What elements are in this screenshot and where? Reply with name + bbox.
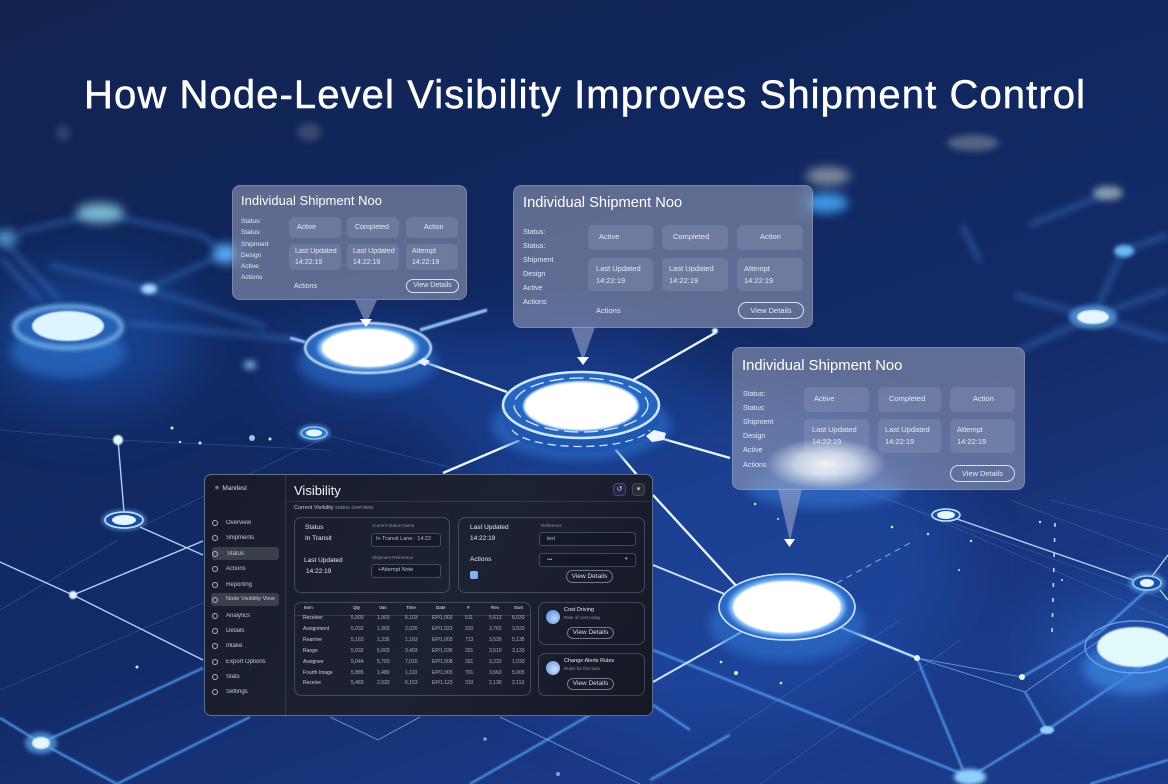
- table rows: EP/1,123: [432, 680, 453, 686]
- view details button: View Details: [750, 306, 792, 315]
- table rows: 3,663: [489, 670, 502, 676]
- field labels: Status:: [523, 227, 545, 236]
- status cells: 14:22:19: [412, 259, 439, 266]
- field labels: Actions: [241, 274, 262, 281]
- status cells: 14:22:19: [957, 437, 986, 446]
- thin bright connections: [0, 440, 1168, 660]
- pointer: [360, 319, 372, 327]
- card body: [513, 185, 813, 328]
- menu items: Reporting: [226, 582, 252, 588]
- table rows: EP/1,003: [432, 670, 453, 676]
- table rows: 5,003: [351, 615, 364, 621]
- table header: Van: [379, 605, 387, 610]
- small network nodes: [25, 305, 1165, 784]
- table rows: 5,483: [351, 680, 364, 686]
- alert card one: Rate of cost today: [564, 615, 600, 620]
- table rows: 1,110: [405, 670, 417, 676]
- field labels: Design: [241, 252, 261, 259]
- status cells: [804, 387, 1015, 453]
- alert card two: Rules for this lane: [564, 666, 600, 671]
- field labels: Active: [241, 263, 259, 270]
- view details button: View Details: [413, 282, 452, 289]
- card body: [232, 185, 467, 300]
- soft bokeh nodes: [0, 167, 850, 264]
- table rows: 1,335: [377, 637, 390, 643]
- table rows: [303, 615, 525, 686]
- status cells: Action: [424, 224, 443, 231]
- status cells: Last Updated: [596, 264, 641, 273]
- dashboard window: [204, 474, 653, 716]
- field labels: Shipment: [523, 255, 553, 264]
- pointer: [577, 357, 589, 365]
- table rows: 331: [465, 648, 473, 654]
- table rows: 3,233: [489, 659, 502, 665]
- status cells: [289, 217, 458, 270]
- node: far right hub: [1083, 621, 1168, 694]
- actions label: Actions: [813, 468, 838, 477]
- card heading: Individual Shipment Noo: [241, 193, 382, 208]
- update card: ▾: [625, 556, 628, 562]
- node: central hub: [491, 372, 671, 461]
- glow behind right card: [747, 468, 903, 508]
- field labels: Shipment: [241, 241, 268, 248]
- table rows: EP/1,023: [432, 626, 453, 632]
- status cells: Action: [973, 394, 994, 403]
- update card: [458, 517, 645, 593]
- table rows: 3,530: [489, 637, 502, 643]
- table rows: 5,703: [377, 659, 390, 665]
- soft blurred upper connections: [0, 193, 1168, 350]
- node: upper left hub: [298, 323, 438, 392]
- status card: [294, 517, 450, 593]
- status cells: Active: [297, 224, 316, 231]
- status cells: 14:22:19: [812, 437, 841, 446]
- table rows: Assignment: [303, 626, 329, 632]
- menu items: Overview: [226, 520, 251, 526]
- table rows: 3,763: [489, 626, 502, 632]
- table rows: 6,103: [405, 615, 418, 621]
- table header: Time: [406, 605, 416, 610]
- alert card one: [538, 602, 645, 645]
- table rows: 3,033: [512, 626, 525, 632]
- status cells: 14:22:19: [353, 259, 380, 266]
- menu items: Shipments: [226, 535, 254, 541]
- menu items: Status: [227, 551, 244, 557]
- status cells: Completed: [673, 232, 709, 241]
- data table: [294, 602, 531, 696]
- field labels: Status:: [241, 218, 261, 225]
- status card: Shipment Reference: [372, 555, 413, 560]
- status cells: 14:22:19: [596, 276, 625, 285]
- status cells: Last Updated: [295, 248, 337, 255]
- table rows: 310: [465, 680, 473, 686]
- title: How Node-Level Visibility Improves Shipment Control: [84, 73, 1085, 117]
- view details button: [738, 302, 804, 319]
- status cells: Active: [599, 232, 619, 241]
- node: lower right hub: [709, 574, 865, 661]
- view details button: View Details: [962, 469, 1003, 478]
- table rows: EP/1,508: [432, 659, 453, 665]
- status cells: Last Updated: [812, 425, 857, 434]
- menu items: Settings: [226, 689, 248, 695]
- callout tail: [571, 327, 595, 357]
- table rows: 5,032: [351, 648, 364, 654]
- field labels: Actions: [743, 460, 767, 469]
- menu items: [212, 520, 275, 695]
- globe icon: [546, 661, 560, 675]
- table rows: 310: [465, 626, 473, 632]
- table rows: 701: [465, 670, 473, 676]
- table rows: EP/1,036: [432, 648, 453, 654]
- table rows: Fourth Image: [303, 670, 333, 676]
- sidebar: [205, 475, 286, 715]
- field labels: Status:: [743, 403, 765, 412]
- table rows: 2,033: [377, 680, 390, 686]
- dashboard heading: Visibility: [294, 483, 341, 498]
- active item highlights: [212, 547, 279, 560]
- field labels: Status:: [743, 389, 765, 398]
- card: shipment node centre: [513, 185, 813, 365]
- table rows: 5,885: [351, 670, 364, 676]
- bright white links: [427, 333, 740, 590]
- field labels: Shipment: [743, 417, 773, 426]
- menu items: Actions: [226, 566, 246, 572]
- header icons: [613, 483, 645, 496]
- status card: Status: [305, 524, 323, 531]
- globe icon: [546, 610, 560, 624]
- callout tail: [355, 300, 377, 319]
- status cells: 14:22:19: [295, 259, 322, 266]
- callout tail: [778, 489, 802, 541]
- status cells: Attempt: [957, 425, 983, 434]
- table rows: 1,163: [405, 637, 418, 643]
- field labels: [241, 218, 268, 281]
- table header: #: [467, 605, 470, 610]
- table rows: 5,613: [489, 615, 502, 621]
- update card: View Details: [572, 573, 607, 580]
- status cells: Action: [760, 232, 781, 241]
- table rows: EP/1,003: [432, 615, 453, 621]
- status cells: Completed: [355, 224, 389, 231]
- table header: Item: [304, 605, 313, 610]
- status cells: [588, 225, 803, 291]
- field labels: Actions: [523, 297, 547, 306]
- header divider: [286, 501, 654, 502]
- table rows: 5,044: [351, 659, 364, 665]
- card heading: Individual Shipment Noo: [523, 195, 682, 211]
- table rows: 6,153: [405, 680, 418, 686]
- alert card one: View Details: [573, 629, 608, 636]
- table rows: 2,020: [405, 626, 418, 632]
- menu items: Stats: [226, 674, 240, 680]
- status cells: 14:22:19: [885, 437, 914, 446]
- table rows: 3,403: [405, 648, 418, 654]
- actions label: Actions: [294, 283, 317, 290]
- table rows: 3,510: [489, 648, 502, 654]
- field labels: [523, 227, 554, 306]
- hot glow seen through glass: [765, 438, 887, 490]
- table rows: Range: [303, 648, 318, 654]
- update card: Actions: [470, 556, 491, 563]
- menu items: Intake: [226, 643, 242, 649]
- table rows: 1,903: [377, 615, 390, 621]
- alert card two: Change Alerts Rules: [564, 658, 614, 664]
- lower blue connections: [0, 590, 1168, 784]
- view details button: [950, 465, 1015, 482]
- table rows: 5,005: [512, 670, 525, 676]
- status card: In Transit: [305, 535, 332, 542]
- status cells: Attempt: [744, 264, 770, 273]
- update card: Last Updated: [470, 524, 509, 531]
- table rows: 2,113: [512, 680, 524, 686]
- update card: text: [547, 536, 555, 542]
- field labels: [743, 389, 774, 469]
- header icons: ↺: [617, 486, 622, 493]
- table rows: Receive: [303, 680, 321, 686]
- subheading: Current Visibility status overview: [294, 505, 373, 511]
- card body: [732, 347, 1025, 490]
- table header: Rev: [491, 605, 499, 610]
- menu items: Details: [226, 628, 244, 634]
- status cells: 14:22:19: [744, 276, 773, 285]
- status cells: Completed: [889, 394, 925, 403]
- table rows: Receiver: [303, 615, 323, 621]
- table rows: 5,032: [351, 626, 364, 632]
- table rows: 331: [465, 659, 473, 665]
- table rows: Rearrive: [303, 637, 322, 643]
- node: far left hub: [10, 306, 126, 378]
- card: shipment node left: [232, 185, 467, 327]
- alert card one: Cost Driving: [564, 607, 594, 613]
- card heading: Individual Shipment Noo: [742, 358, 902, 374]
- selected item highlight: [211, 593, 279, 606]
- card: shipment node right: [572, 347, 1025, 680]
- update card: •••: [547, 557, 552, 563]
- update card: Reference: [541, 523, 562, 528]
- status cells: Attempt: [412, 248, 436, 255]
- update card: 14:22:19: [470, 535, 495, 542]
- field labels: Active: [743, 445, 763, 454]
- status card: +Attempt Note: [378, 567, 413, 573]
- tiny particles: [136, 426, 1063, 776]
- menu items: Export Options: [226, 659, 266, 665]
- field labels: Active: [523, 283, 543, 292]
- table rows: 1,480: [377, 670, 390, 676]
- table rows: 7,010: [405, 659, 418, 665]
- table header: Date: [436, 605, 446, 610]
- status cells: Last Updated: [669, 264, 714, 273]
- table rows: 3,133: [512, 648, 525, 654]
- table rows: EP/1,003: [432, 637, 453, 643]
- field labels: Status:: [523, 241, 545, 250]
- status card: Current Status Name: [372, 523, 414, 528]
- table header: Qty: [353, 605, 360, 610]
- table rows: 5,135: [512, 637, 525, 643]
- table header: [295, 603, 530, 616]
- status card: In Transit Lane · 14:22: [376, 536, 431, 542]
- status cells: Active: [814, 394, 834, 403]
- field labels: Design: [523, 269, 545, 278]
- status card: Last Updated: [304, 557, 343, 564]
- sidebar brand: ≡ Manifest: [215, 485, 247, 492]
- faint perspective grid: [0, 430, 1168, 784]
- status card: 14:22:19: [306, 568, 331, 575]
- header icons: ▾: [637, 486, 640, 493]
- alert card two: [538, 653, 645, 696]
- table rows: 5,163: [351, 637, 364, 643]
- alert card two: View Details: [573, 680, 608, 687]
- field labels: Design: [743, 431, 765, 440]
- table header: Sum: [514, 605, 523, 610]
- view details button: [406, 279, 459, 293]
- menu items: Node Visibility View: [226, 596, 275, 602]
- table rows: 1,033: [512, 659, 525, 665]
- menu items: Analytics: [226, 613, 250, 619]
- status cells: Last Updated: [353, 248, 395, 255]
- table rows: 8,033: [512, 615, 525, 621]
- status cells: Last Updated: [885, 425, 930, 434]
- table rows: 5,003: [377, 648, 390, 654]
- table rows: Assignee: [303, 659, 324, 665]
- field labels: Status:: [241, 229, 261, 236]
- status cells: 14:22:19: [669, 276, 698, 285]
- table rows: 713: [465, 637, 473, 643]
- table rows: 511: [465, 615, 473, 621]
- table rows: 1,303: [377, 626, 390, 632]
- pointer: [784, 539, 795, 547]
- actions label: Actions: [596, 306, 621, 315]
- table rows: 2,130: [489, 680, 502, 686]
